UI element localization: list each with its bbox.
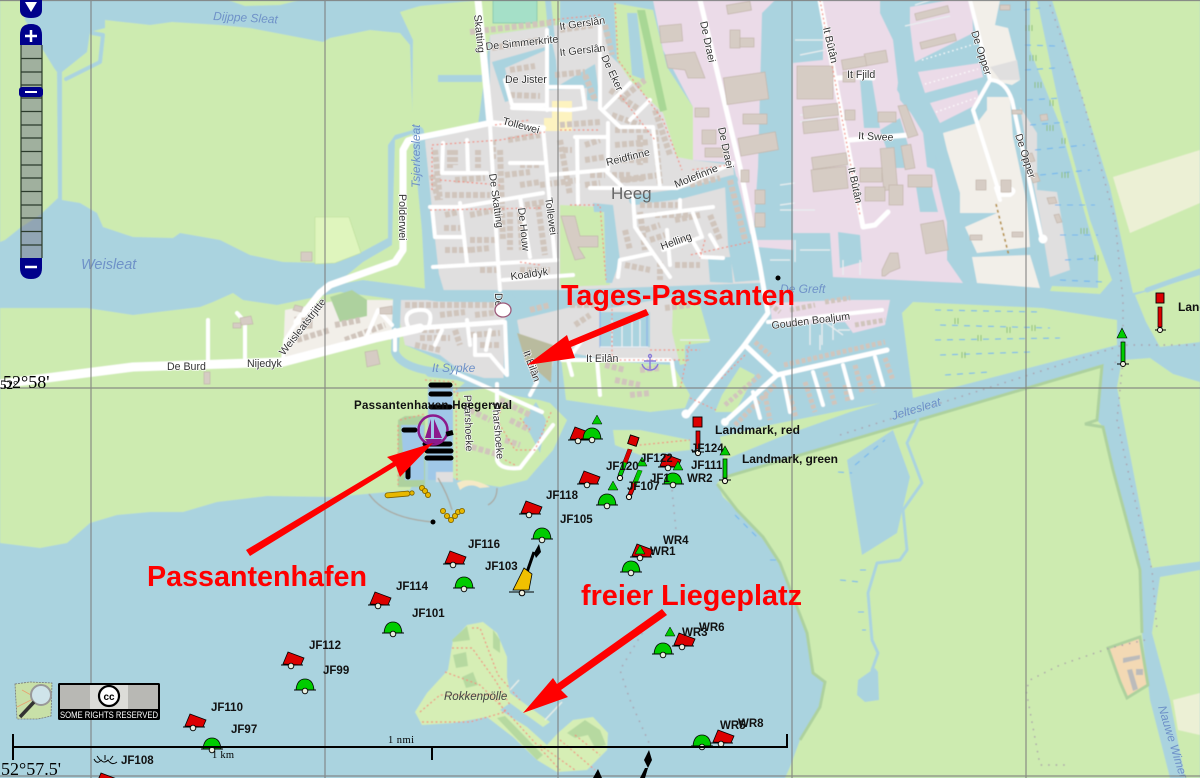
callout headings: freier Liegeplatz bbox=[581, 580, 802, 612]
school bbox=[544, 101, 572, 131]
land: north of Jeltesleat bbox=[902, 302, 1117, 398]
callout headings: Passantenhafen bbox=[147, 561, 367, 593]
road name labels: De Jister bbox=[505, 74, 547, 86]
seamark labels: WR4 bbox=[663, 535, 689, 547]
road name labels: Pharshoeke bbox=[461, 395, 475, 452]
Nauwe Wimer side canal bbox=[1155, 564, 1200, 570]
road name labels: De Burd bbox=[167, 361, 206, 373]
seamark labels: WR1 bbox=[650, 546, 676, 558]
land: marsh field lighter plot bbox=[315, 217, 361, 264]
seamark labels: JF107 bbox=[627, 481, 660, 493]
road name labels: Molefinne bbox=[673, 162, 720, 191]
seamark labels: JF101 bbox=[412, 608, 445, 620]
road name labels: It Bûtân bbox=[820, 26, 840, 64]
zoom in button bbox=[20, 24, 42, 45]
harbour sailboat symbol bbox=[418, 416, 454, 444]
place labels: Heeg bbox=[611, 184, 652, 203]
callout headings: Tages-Passanten bbox=[561, 280, 795, 312]
seamark labels: JF122 bbox=[640, 453, 673, 465]
water name labels: Jeltesleat bbox=[889, 394, 943, 423]
water name labels: Tsjerkesleat bbox=[409, 124, 423, 188]
road name labels: De Draei bbox=[715, 126, 735, 170]
place labels bbox=[444, 184, 652, 703]
island Rokkenpolle bbox=[415, 622, 608, 772]
arrow: Passantenhafen bbox=[246, 443, 433, 556]
seamark labels: JF124 bbox=[691, 443, 724, 455]
water name labels: Weisleat bbox=[81, 257, 137, 273]
road name labels: Skatting bbox=[471, 14, 487, 53]
town residential base bbox=[425, 18, 768, 290]
house rows under roads bbox=[295, 22, 893, 455]
road name labels: De Opper bbox=[968, 29, 994, 77]
land: north-west strip bbox=[0, 0, 58, 242]
scale bar: 1 nmi bbox=[388, 735, 414, 746]
black point markers bbox=[430, 276, 780, 524]
seamarks: lateral red buoys bbox=[94, 427, 734, 778]
road name labels: De Draei bbox=[697, 20, 717, 64]
Creative Commons badge: SOME RIGHTS RESERVED bbox=[60, 710, 158, 720]
land: south-east polder bbox=[717, 365, 1170, 778]
black beacons bottom bbox=[593, 750, 652, 778]
town: right of canal bbox=[517, 297, 685, 380]
road name labels: De Houw bbox=[515, 207, 532, 252]
harbour islet south of Heeg bbox=[720, 403, 880, 460]
latitude labels: 52°58' bbox=[3, 372, 49, 392]
lake and stream bbox=[847, 430, 910, 555]
Creative Commons badge: cc bbox=[103, 692, 115, 703]
road name labels: De Simmerkrite bbox=[485, 33, 559, 53]
seamark labels: WR3 bbox=[682, 627, 708, 639]
landmark east red bbox=[1155, 293, 1166, 332]
seamark labels: JF99 bbox=[323, 665, 349, 677]
seamark labels: JF116 bbox=[468, 539, 500, 551]
pool bbox=[493, 0, 537, 23]
road name labels bbox=[167, 14, 1038, 460]
pan down button bbox=[20, 0, 42, 18]
seamark labels: JF97 bbox=[231, 724, 257, 736]
farm bbox=[1108, 637, 1148, 698]
seamark labels: JF1 bbox=[650, 473, 670, 485]
place labels: Rokkenpölle bbox=[444, 691, 507, 703]
seamark labels: WR8 bbox=[738, 718, 764, 730]
scale bar: 1 km bbox=[212, 750, 234, 761]
seamark labels: JF114 bbox=[396, 581, 429, 593]
road name labels: Gouden Boaljum bbox=[771, 310, 851, 332]
arrow: freier Liegeplatz bbox=[523, 609, 667, 713]
landmark red bbox=[692, 417, 704, 456]
land: Polderwei strip and north centre bbox=[335, 132, 425, 290]
canals through town bbox=[365, 0, 770, 453]
road name labels: It Gerslân bbox=[559, 15, 606, 33]
road name labels: De Skatting bbox=[486, 173, 506, 229]
marina jetties bbox=[600, 310, 647, 347]
road name labels: It Fjild bbox=[847, 69, 875, 81]
landmark east green bbox=[1117, 328, 1129, 366]
road name labels: It Eilân bbox=[520, 349, 543, 384]
red arrows bbox=[246, 309, 667, 713]
road name labels: Helling bbox=[659, 230, 694, 253]
scale bar bbox=[13, 734, 787, 761]
seamark labels: Landmark, red bbox=[715, 423, 800, 437]
land: thin dyke strip bbox=[1030, 0, 1112, 294]
marsh reeds and water ticks bbox=[735, 8, 1105, 630]
zoom control bbox=[19, 0, 43, 279]
road name labels: Tollewei bbox=[501, 115, 541, 137]
commercial pink blocks bbox=[653, 0, 793, 250]
road name labels: Pharshoeke bbox=[489, 402, 506, 460]
inlet in north polder bbox=[66, 33, 103, 79]
seamark labels: WR5 bbox=[720, 720, 746, 732]
landmark green bbox=[719, 446, 731, 484]
pale field bbox=[1113, 150, 1200, 233]
topmark JF108 bbox=[94, 755, 117, 764]
town greens bbox=[614, 3, 693, 160]
harbour basin bbox=[369, 380, 497, 522]
red dotted footpaths bbox=[404, 0, 860, 480]
anchor icon bbox=[642, 354, 658, 370]
grey east residential bbox=[1020, 107, 1070, 277]
seamark labels: Landmark, green bbox=[742, 452, 838, 466]
tilted landmark red-green bbox=[617, 435, 639, 481]
small island bbox=[613, 430, 690, 455]
tilted landmark green-red bbox=[626, 457, 647, 500]
seamark labels: Passantenhaven Heegerwal bbox=[354, 400, 512, 412]
water name labels: Dijppe Sleat bbox=[213, 9, 279, 26]
black and yellow beacon bbox=[509, 544, 541, 596]
seamark labels: JF118 bbox=[546, 490, 579, 502]
road name labels: It Eilân bbox=[586, 353, 618, 365]
water name labels: De Greft bbox=[780, 282, 826, 296]
zoom out button bbox=[20, 258, 42, 279]
latitude labels: 52° bbox=[0, 377, 18, 392]
bank shading: Jeltesleat south bank bbox=[722, 366, 1142, 633]
bridge marker near De bbox=[495, 303, 511, 317]
seamark labels: JF112 bbox=[309, 640, 341, 652]
beige De Opper block bbox=[970, 0, 1020, 85]
seamark labels: JF110 bbox=[211, 702, 243, 714]
island with anchor bbox=[561, 358, 690, 412]
water name labels: Nauwe Wimer bbox=[1155, 704, 1191, 778]
zoom slider bbox=[19, 45, 43, 258]
seamark labels bbox=[121, 300, 1200, 767]
arrow: Tages-Passanten bbox=[527, 309, 649, 365]
seamark labels: WR6 bbox=[699, 622, 725, 634]
water name labels: It Sypke bbox=[432, 361, 476, 375]
land: harbour peninsula bbox=[440, 387, 567, 487]
road name labels: De Opper bbox=[1012, 132, 1038, 180]
road name labels: Weisleatstrjitte bbox=[277, 296, 329, 358]
land: east polder top bbox=[1052, 0, 1200, 293]
park with large building bbox=[560, 205, 610, 287]
road name labels: It Bûtân bbox=[845, 166, 864, 204]
land: south-west polder with shoreline bbox=[0, 292, 470, 548]
land: top edge sliver bbox=[228, 0, 300, 6]
latitude labels bbox=[0, 372, 61, 778]
olive ground It Eilan bbox=[517, 333, 553, 383]
OSM magnifier icon bbox=[15, 682, 52, 719]
seamark labels: JF105 bbox=[560, 514, 593, 526]
road name labels: Koaldyk bbox=[510, 266, 549, 283]
seamark labels: JF103 bbox=[485, 561, 518, 573]
harbour mooring bars bbox=[404, 385, 451, 477]
seamark labels: JF120 bbox=[606, 461, 639, 473]
road name labels: It Swee bbox=[858, 130, 894, 144]
seamarks: lateral green buoys bbox=[201, 415, 713, 753]
channel markers dotted bbox=[620, 5, 1200, 765]
callout headings bbox=[147, 280, 802, 612]
road name labels: Nijedyk bbox=[247, 358, 282, 370]
major white roads bbox=[0, 0, 1048, 468]
road name labels: Polderwei bbox=[396, 194, 408, 241]
dock rows De Opper bbox=[922, 44, 978, 112]
inner dock basins bbox=[838, 80, 938, 268]
road name labels: Tollewei bbox=[542, 197, 559, 236]
Creative Commons badge bbox=[58, 683, 160, 720]
road name labels: De bbox=[492, 293, 504, 307]
large buildings bbox=[204, 1, 1062, 384]
seamark labels: JF111 bbox=[691, 460, 723, 472]
road name labels: De Eker bbox=[598, 53, 626, 93]
seamark labels: JF108 bbox=[121, 755, 154, 767]
seamark labels: WR2 bbox=[687, 473, 713, 485]
road name labels: Reidfinne bbox=[605, 146, 651, 169]
yellow mooring buoys bbox=[385, 485, 465, 523]
land: north polder bbox=[62, 20, 413, 263]
road name labels: It Gerslân bbox=[559, 42, 606, 59]
